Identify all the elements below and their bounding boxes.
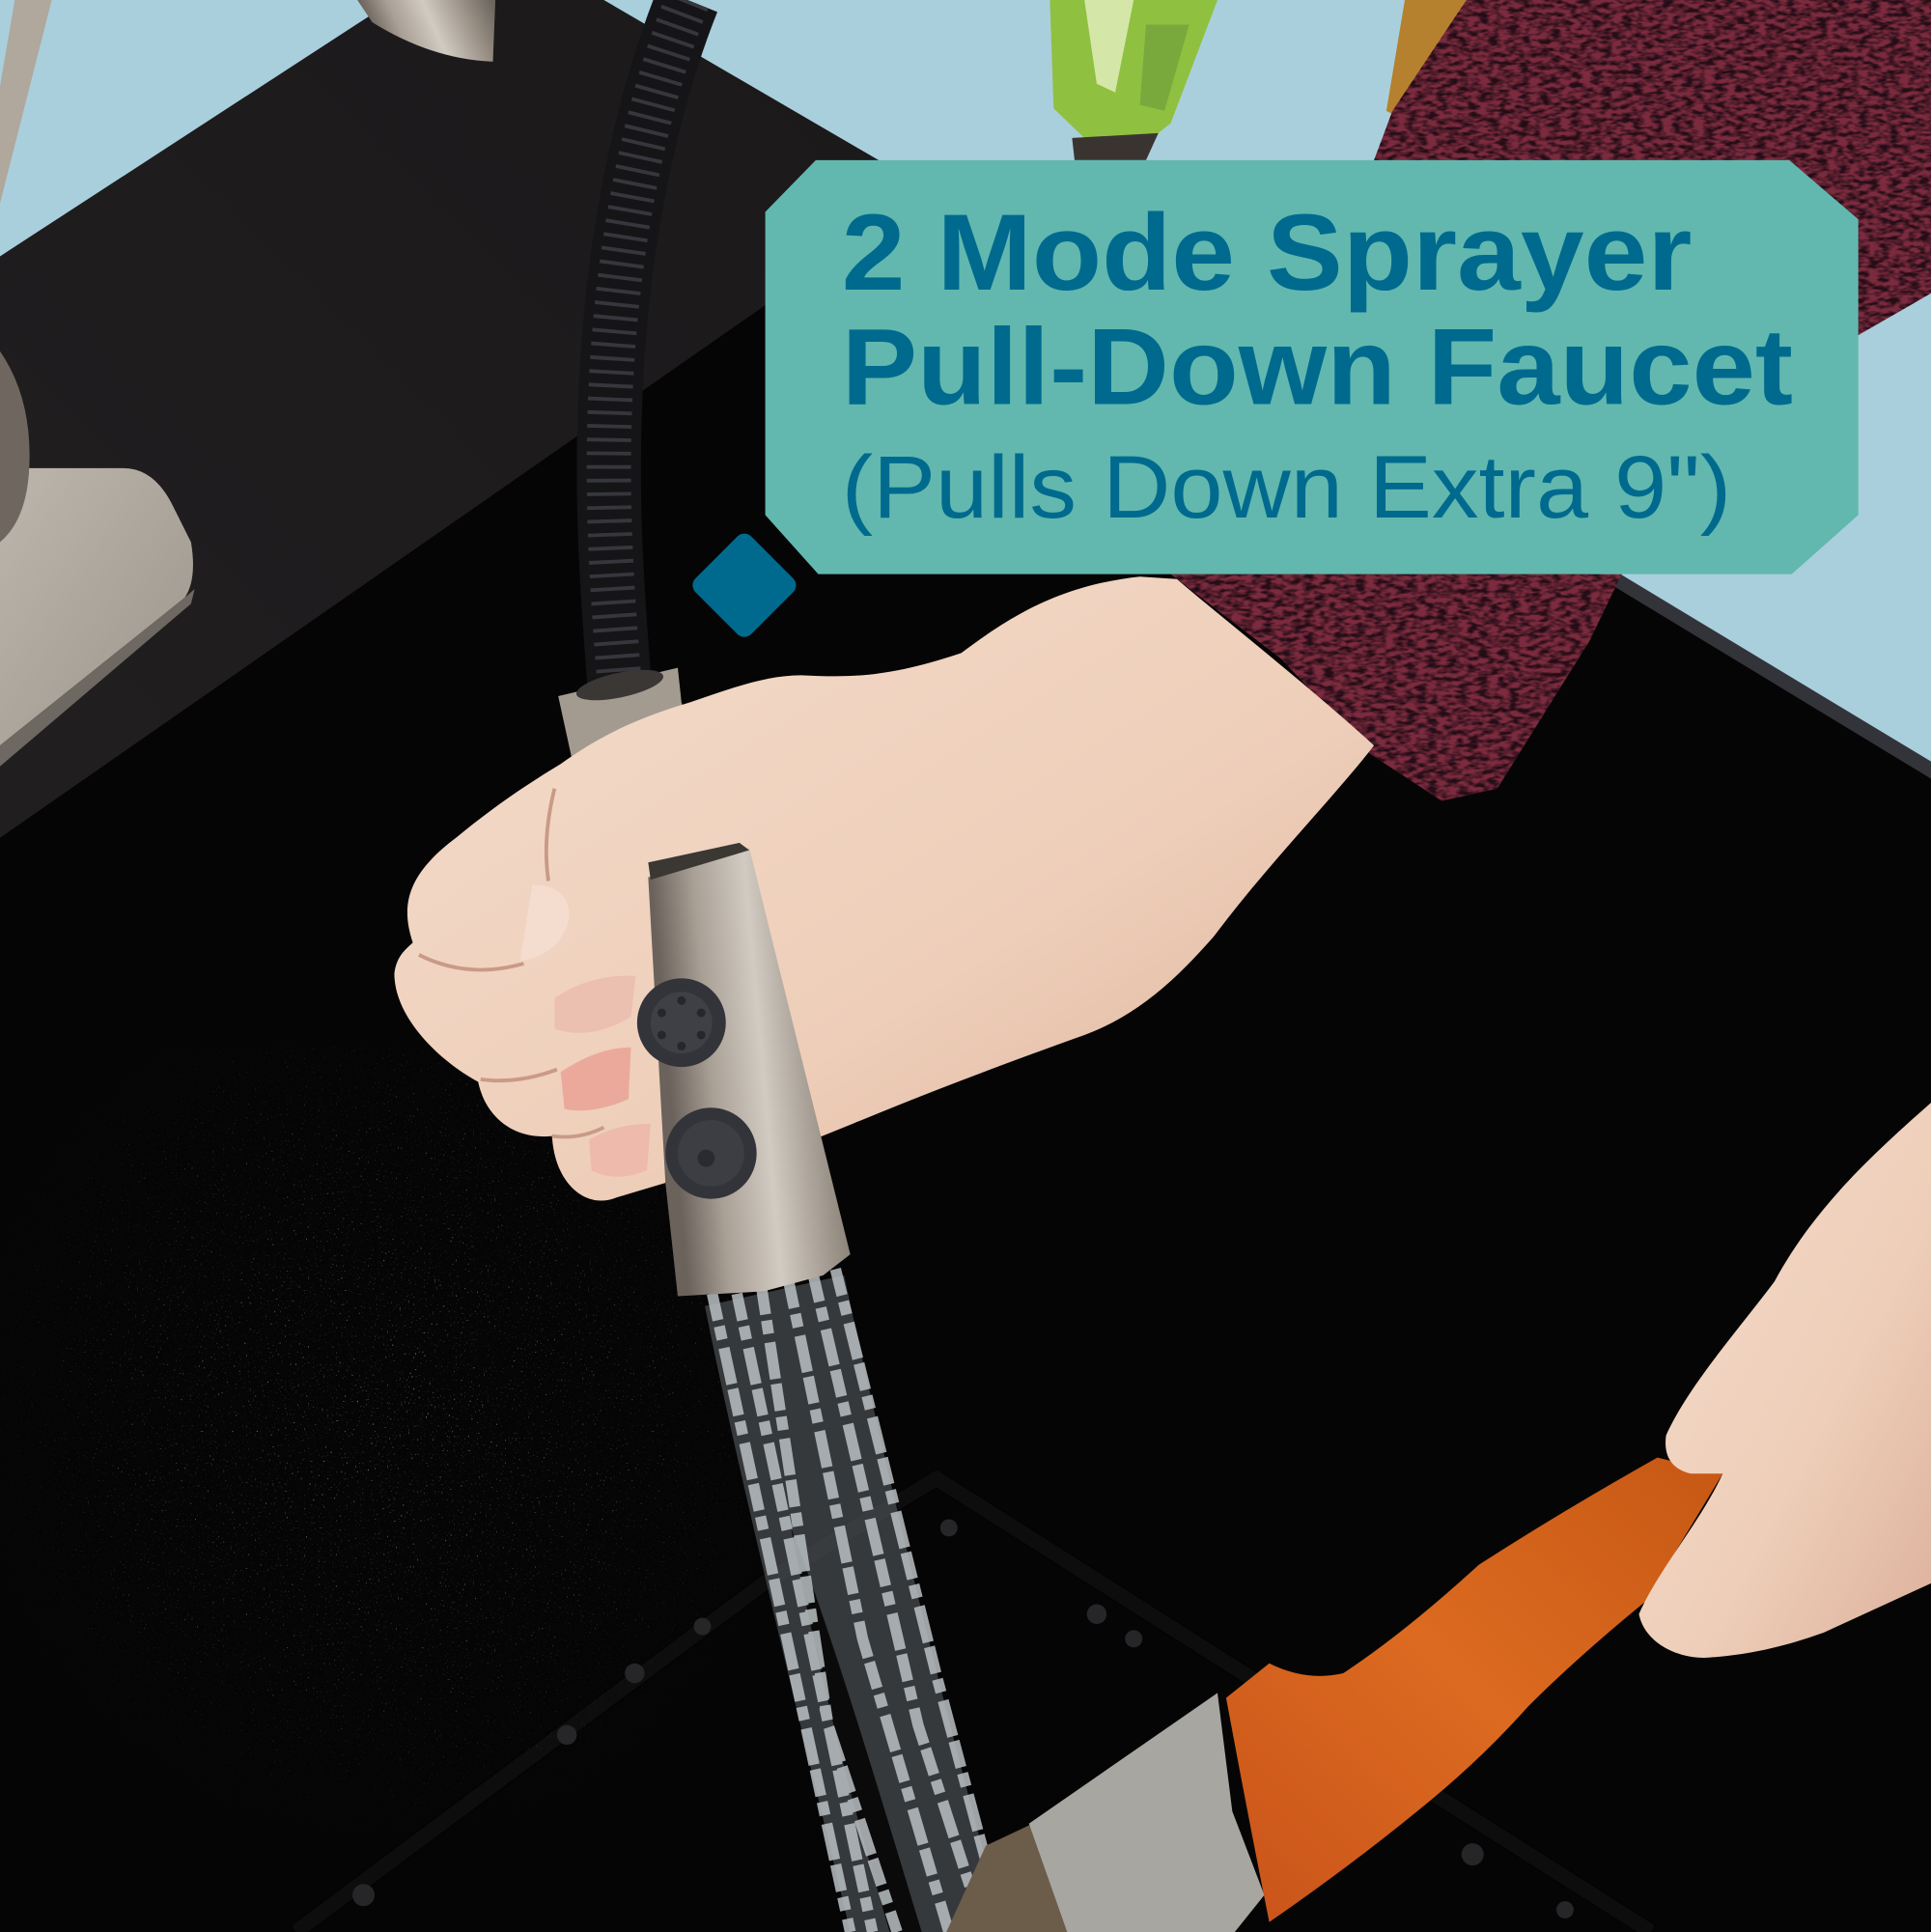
faucet post <box>0 351 30 543</box>
ferrule <box>1029 1693 1265 1932</box>
pen <box>1386 0 1467 117</box>
faucet neck top <box>357 0 495 62</box>
heading line one: 2 Mode Sprayer <box>842 191 1692 313</box>
water speckles <box>0 1048 1574 1918</box>
sprayer neck <box>558 664 727 869</box>
sleeve <box>1159 0 1931 813</box>
hand holding sprayer <box>394 576 1374 1200</box>
faucet arm top left <box>0 0 52 204</box>
rim edge right <box>1614 574 1931 779</box>
panel background <box>766 160 1859 574</box>
basin floor edge <box>295 1478 1651 1932</box>
paint brush <box>946 1458 1722 1932</box>
heading line two: Pull-Down Faucet <box>842 306 1793 428</box>
sprayer body <box>648 843 851 1297</box>
spray button lower <box>665 1107 757 1199</box>
callout panel <box>766 160 1859 574</box>
spray button upper <box>637 978 726 1067</box>
bristles <box>946 1824 1075 1932</box>
umbrella <box>1049 0 1217 160</box>
handle <box>1226 1458 1722 1922</box>
water spray <box>705 1269 986 1932</box>
subheading: (Pulls Down Extra 9") <box>842 438 1731 537</box>
faucet base plate <box>0 351 195 767</box>
callout marker diamond <box>688 529 800 641</box>
finger nails <box>520 884 651 1177</box>
second hand <box>1639 1103 1931 1658</box>
hose <box>609 0 687 690</box>
finger creases <box>419 789 603 1136</box>
